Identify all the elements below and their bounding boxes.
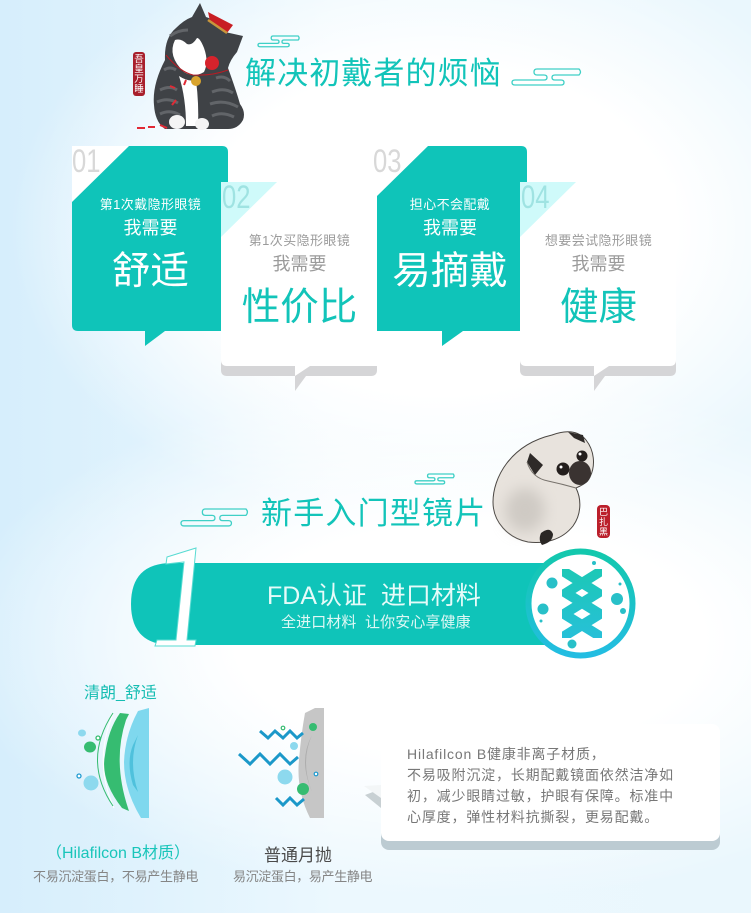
title: section 2: 新手入门型镜片 bbox=[261, 496, 486, 531]
card 4 text: 健康 bbox=[560, 286, 637, 329]
callout text: Hilafilcon B健康非离子材质， bbox=[407, 746, 606, 762]
card 3 text: 我需要 bbox=[423, 218, 477, 238]
numeral 02: 02 bbox=[222, 179, 250, 215]
card 1 text bbox=[100, 197, 201, 293]
card 2 text: 我需要 bbox=[272, 254, 326, 274]
icon: cat mascot: 吾 bbox=[134, 54, 144, 65]
card 2 bbox=[221, 182, 377, 391]
card 1 text: 我需要 bbox=[124, 218, 178, 238]
label: clear comfort: 清朗_舒适 bbox=[84, 685, 157, 702]
callout text: 心厚度，弹性材料抗撕裂，更易配戴。 bbox=[407, 809, 659, 825]
card 3 text bbox=[392, 197, 508, 293]
numeral 04: 04 bbox=[521, 179, 549, 215]
icon: pug mascot: 黑 bbox=[599, 527, 608, 537]
icon: cloud middle right bbox=[415, 474, 454, 484]
callout text: 不易吸附沉淀，长期配戴镜面依然洁净如 bbox=[407, 767, 674, 783]
numeral 1 bbox=[155, 548, 196, 646]
callout box bbox=[364, 724, 720, 850]
icon: cloud top left bbox=[258, 36, 299, 47]
card 1 bbox=[72, 146, 228, 346]
icon: pug mascot: 扎 bbox=[599, 516, 608, 527]
title: section 1: 解决初戴者的烦恼 bbox=[245, 56, 502, 91]
icon: dna badge bbox=[528, 552, 632, 656]
icon: pug mascot: 巴 bbox=[599, 507, 608, 517]
card 2 text: 性价比 bbox=[242, 286, 357, 329]
icon: cat mascot: 皇 bbox=[134, 63, 144, 75]
banner subtitle: 全进口材料 让你安心享健康 bbox=[281, 614, 471, 631]
icon: cat mascot bbox=[133, 3, 244, 130]
card 4 text: 想要尝试隐形眼镜 bbox=[545, 233, 652, 248]
card 2 text: 第1次买隐形眼镜 bbox=[249, 233, 350, 248]
card 2 text bbox=[242, 233, 357, 329]
card 1 text: 舒适 bbox=[112, 250, 189, 293]
icon: cloud top right bbox=[512, 69, 580, 85]
card 4 bbox=[520, 182, 676, 391]
card 1 text: 第1次戴隐形眼镜 bbox=[100, 197, 201, 212]
card 3 text: 易摘戴 bbox=[392, 250, 508, 293]
icon: ordinary lens bbox=[239, 708, 324, 818]
numeral 01: 01 bbox=[72, 143, 100, 179]
label: hilafilcon b: （Hilafilcon B材质） bbox=[46, 845, 190, 862]
banner bbox=[131, 548, 632, 656]
icon: cat mascot: 万 bbox=[134, 74, 144, 85]
numeral 03: 03 bbox=[373, 143, 401, 179]
icon: cat mascot: 睡 bbox=[134, 83, 144, 95]
callout text: 初，减少眼睛过敏，护眼有保障。标准中 bbox=[407, 788, 674, 804]
banner heading: FDA认证 进口材料 bbox=[267, 582, 481, 610]
card 4 text: 我需要 bbox=[572, 254, 626, 274]
callout text bbox=[407, 746, 674, 825]
caption: ordinary: 易沉淀蛋白，易产生静电 bbox=[233, 869, 372, 884]
card 3 bbox=[377, 146, 527, 346]
icon: hilafilcon lens bbox=[77, 708, 149, 818]
card 4 text bbox=[545, 233, 652, 329]
card 3 text: 担心不会配戴 bbox=[410, 197, 490, 212]
icon: cloud middle left bbox=[181, 509, 247, 526]
caption: hilafilcon: 不易沉淀蛋白，不易产生静电 bbox=[33, 869, 198, 884]
label: ordinary monthly: 普通月抛 bbox=[264, 846, 332, 865]
icon: pug mascot bbox=[493, 432, 610, 545]
